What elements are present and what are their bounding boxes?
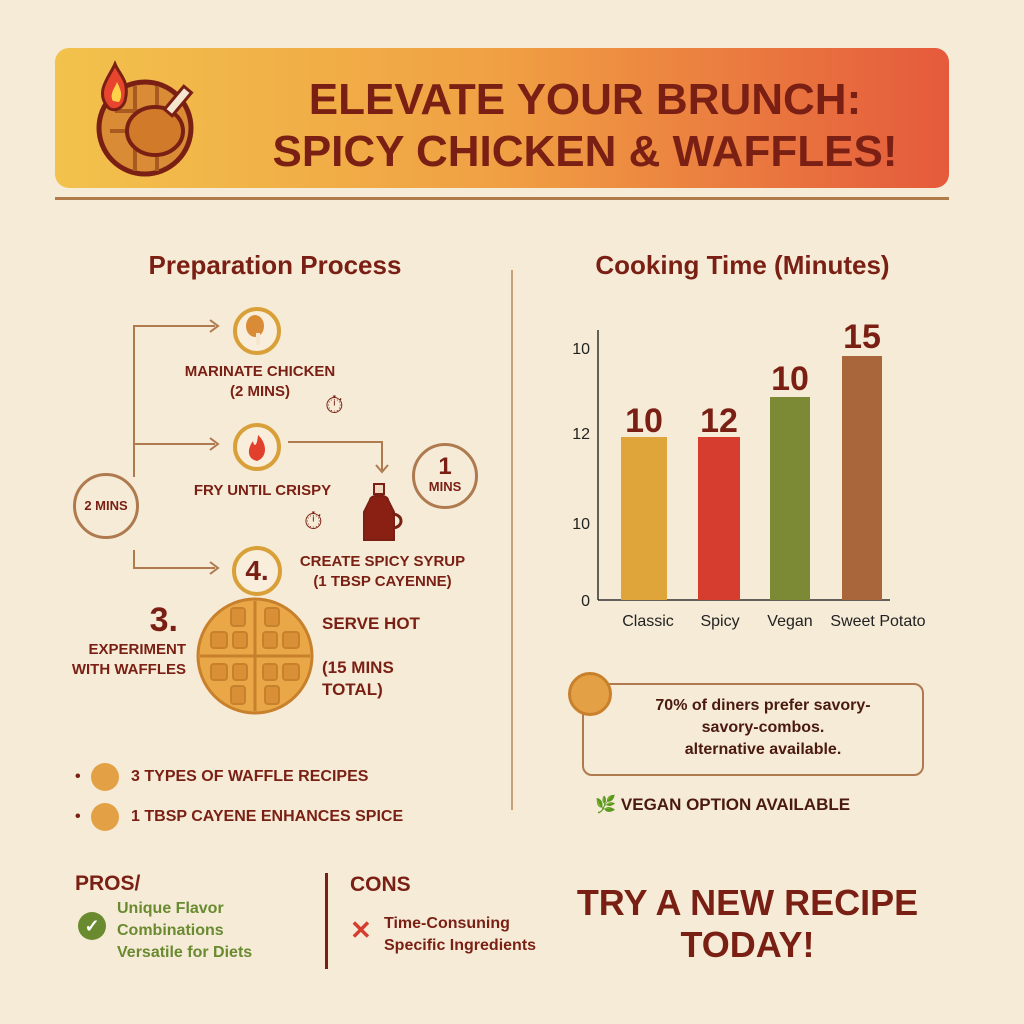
step: serve hot (322, 614, 420, 699)
icon: syrup bottle (363, 483, 402, 541)
callout: diners stat: savory-combos. (702, 719, 824, 736)
text: Specific Ingredients (384, 937, 536, 954)
text: Time-Consuning (384, 915, 510, 932)
text: Versatile for Diets (117, 944, 252, 961)
bar chart: 15 (843, 318, 881, 356)
heading: cooking time: Cooking Time (Minutes) (595, 250, 890, 280)
pros: PROS/ (75, 872, 140, 895)
step 3: 3. (150, 601, 178, 639)
bar chart: 10 (771, 360, 809, 398)
step: serve hot: TOTAL) (322, 680, 383, 699)
callout: diners stat: alternative available. (685, 741, 841, 758)
step: fry: FRY UNTIL CRISPY (194, 482, 331, 499)
badge: 1 mins: 1 (438, 453, 452, 480)
step: marinate: MARINATE CHICKEN (185, 363, 335, 380)
text: Unique Flavor (117, 900, 224, 917)
badge: 2 mins: 2 MINS (84, 498, 128, 513)
step 3: EXPERIMENT (88, 641, 186, 658)
pros (75, 872, 252, 961)
step: serve hot: SERVE HOT (322, 614, 420, 633)
callout: diners stat (582, 683, 924, 776)
flow diagram (72, 307, 478, 714)
title banner (55, 48, 949, 188)
bar chart: 10 (572, 341, 590, 358)
callout: diners stat: 70% of diners prefer savory- (655, 697, 871, 714)
bar chart: 10 (572, 516, 590, 533)
call to action (577, 882, 918, 965)
step: marinate (185, 363, 335, 400)
icon: waffle (196, 598, 314, 714)
text: Combinations (117, 922, 224, 939)
step: marinate: (2 MINS) (230, 383, 290, 400)
step 4 badge (232, 546, 282, 596)
icon: chicken step (233, 307, 281, 355)
bar chart: Classic (622, 613, 674, 630)
step 3: WITH WAFFLES (72, 661, 186, 678)
bar chart: 10 (625, 402, 663, 440)
title text: SPICY CHICKEN & WAFFLES! (272, 127, 898, 176)
bar chart: Sweet Potato (830, 613, 926, 630)
text: ✓ (84, 916, 100, 936)
badge: 1 mins: MINS (429, 479, 461, 494)
call to action: TRY A NEW RECIPE (577, 882, 918, 923)
step: serve hot: (15 MINS (322, 658, 394, 677)
step 3 (72, 601, 186, 678)
step: syrup: (1 TBSP CAYENNE) (313, 573, 452, 590)
title text: ELEVATE YOUR BRUNCH: (309, 75, 861, 124)
bullet list (75, 763, 403, 831)
cons: CONS (350, 873, 411, 896)
badge: 1 mins (412, 443, 478, 509)
bar chart: Vegan (767, 613, 813, 630)
step: syrup: CREATE SPICY SYRUP (300, 553, 465, 570)
bullet list: • 1 TBSP CAYENE ENHANCES SPICE (75, 808, 403, 825)
heading: preparation process: Preparation Process (149, 250, 401, 280)
vegan note: 🌿 VEGAN OPTION AVAILABLE (595, 795, 850, 814)
bar chart (572, 318, 926, 630)
call to action: TODAY! (680, 924, 815, 965)
title text (272, 75, 898, 176)
step 4 badge: 4. (245, 555, 269, 586)
badge: 2 mins (73, 473, 139, 539)
icon: fire step (233, 423, 281, 471)
icon: timer 2: ⏱ (304, 508, 323, 535)
bar chart: 12 (572, 426, 590, 443)
bar chart: 0 (581, 593, 590, 610)
icon: waffle small (568, 672, 612, 716)
icon: waffle chicken logo (96, 60, 194, 176)
cons (350, 873, 536, 954)
icon: timer: ⏱ (325, 392, 344, 419)
bar chart: 12 (700, 402, 738, 440)
text: ✕ (350, 915, 372, 945)
bullet list: • 3 TYPES OF WAFFLE RECIPES (75, 768, 368, 785)
bar chart: Spicy (700, 613, 740, 630)
step: syrup (300, 553, 465, 590)
